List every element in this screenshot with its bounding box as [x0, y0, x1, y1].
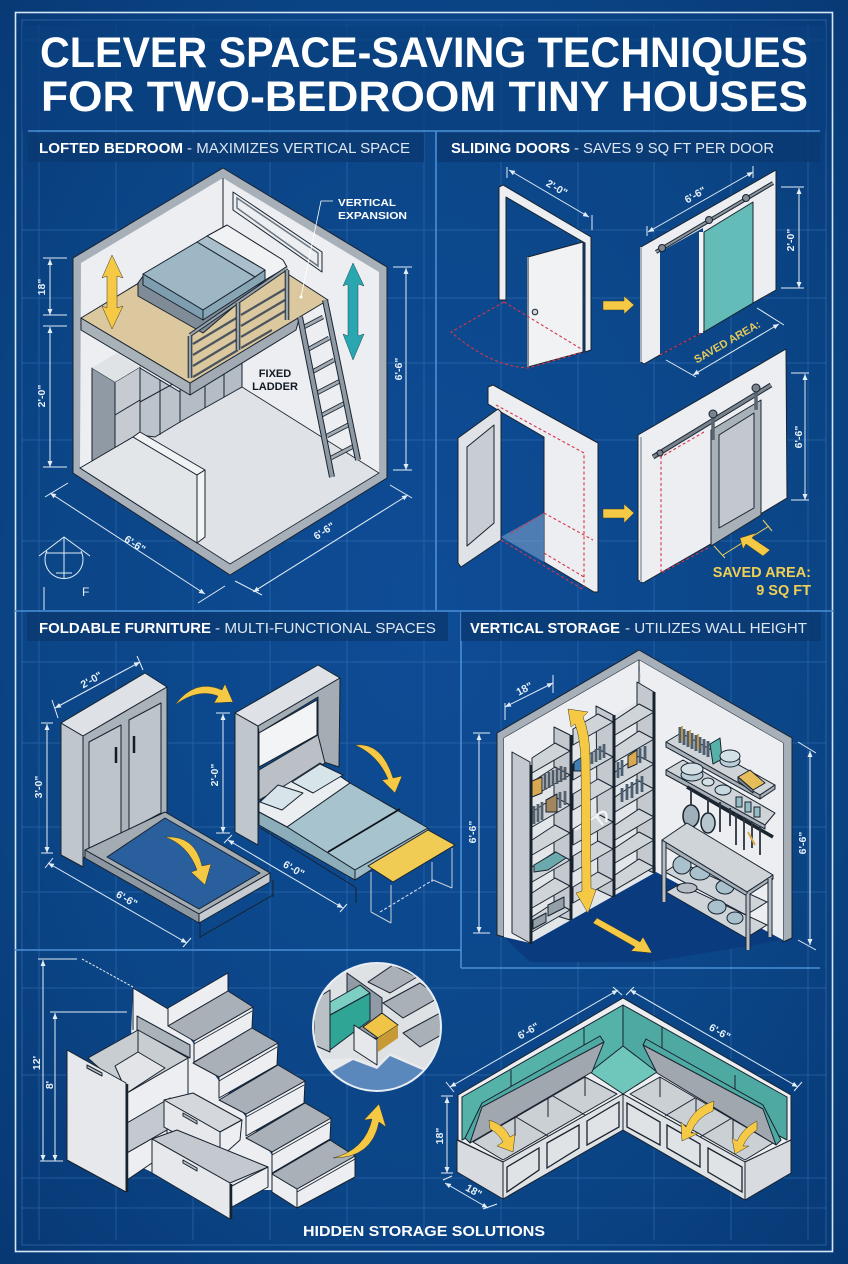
title: CLEVER SPACE-SAVING TECHNIQUES [40, 29, 808, 77]
heading: vertical storage: - UTILIZES WALL HEIGHT [625, 620, 807, 637]
loft railing [190, 268, 287, 378]
dimensions storage [467, 675, 816, 950]
heading: sliding doors [437, 133, 820, 162]
dimension bottom door: 6'-6" [793, 426, 805, 448]
arrow: bed unfolds [355, 745, 402, 793]
icon: roof section symbol [39, 537, 90, 610]
heading: foldable furniture: - MULTI-FUNCTIONAL SPACES [215, 620, 436, 637]
icon: roof section symbol: F [82, 585, 89, 599]
title [40, 29, 808, 121]
murphy bed closed [61, 673, 273, 938]
large bottom drawer [152, 1130, 268, 1219]
dimensions bench: 6'-6" [516, 1021, 541, 1042]
shelf items: books and boxes [532, 744, 645, 929]
arrow: swing to sliding top [603, 296, 634, 314]
stair treads and risers [168, 973, 355, 1208]
panel: vertical storage [461, 612, 821, 962]
saved area label top: SAVED AREA: [692, 319, 763, 366]
dimensions foldable: 2'-0" [79, 670, 104, 691]
arrow: teal vertical [343, 263, 364, 360]
room corner walls [497, 650, 792, 962]
dimensions top doors [507, 166, 804, 288]
heading: lofted bedroom: LOFTED BEDROOM [39, 140, 183, 157]
label: vertical expansion [300, 197, 407, 298]
heading: foldable furniture: FOLDABLE FURNITURE [39, 620, 211, 637]
arrow: vertical double [568, 709, 596, 913]
wall shelves with items [666, 726, 775, 855]
dimensions: 6'-6" [122, 533, 147, 556]
dimensions foldable: 6'-0" [281, 859, 306, 880]
swing door bottom [458, 385, 598, 592]
dimensions stairs: 8' [44, 1081, 56, 1089]
icon: fixed ladder [300, 300, 358, 477]
heading: vertical storage [461, 612, 821, 641]
dimension bottom door [791, 373, 809, 500]
sofa bench [80, 432, 205, 543]
loft platform [81, 232, 328, 395]
dimensions: 2'-0" [36, 385, 48, 407]
label: fixed ladder: LADDER [252, 381, 298, 393]
panel: foldable furniture [27, 612, 455, 947]
saved area label top [666, 308, 784, 377]
dimensions bench: 18" [463, 1182, 484, 1201]
label: vertical expansion: VERTICAL [338, 197, 397, 209]
arrow: yellow loft height [102, 255, 123, 329]
fold-out yellow table [368, 830, 455, 923]
label: vertical expansion: EXPANSION [338, 210, 407, 222]
room shell [73, 168, 387, 575]
dimensions top doors: 2'-0" [785, 229, 797, 251]
heading: lofted bedroom: - MAXIMIZES VERTICAL SPACE [187, 140, 410, 157]
small drawer [164, 1093, 242, 1158]
panel: lofted bedroom [28, 133, 424, 610]
storage cabinets under loft [92, 353, 242, 462]
kitchen work table [662, 823, 773, 950]
title: FOR TWO-BEDROOM TINY HOUSES [41, 73, 808, 121]
heading: lofted bedroom [28, 133, 424, 162]
dimensions foldable [33, 656, 347, 947]
dimensions top doors: 2'-0" [544, 178, 569, 199]
panel: hidden storage solutions [31, 959, 802, 1240]
barn door bottom [638, 349, 787, 583]
dimensions stairs: 12' [31, 1056, 43, 1070]
dimensions: 18" [36, 279, 48, 295]
label: fixed ladder: FIXED [259, 368, 291, 380]
arrows: lids opening [489, 1101, 757, 1154]
dimensions bench: 6'-6" [707, 1022, 732, 1043]
inset: drawer detail circle [312, 962, 442, 1092]
dimensions bench [434, 987, 802, 1209]
arrow: fold down bed [165, 837, 211, 885]
murphy bed open [235, 665, 428, 903]
dimensions top doors: 6'-6" [683, 185, 708, 206]
dimensions storage: 6'-6" [467, 821, 479, 843]
dimensions bench: 18" [434, 1128, 446, 1144]
stairs with drawers [67, 973, 355, 1219]
dimensions: 6'-6" [312, 520, 337, 543]
dimensions foldable: 6'-6" [114, 889, 139, 910]
arrow: closed to open [175, 684, 233, 705]
heading: sliding doors: SLIDING DOORS [451, 140, 570, 157]
arrow: swing to sliding bottom [603, 504, 634, 523]
sliding door top [641, 170, 776, 364]
saved area callout bottom [713, 520, 811, 599]
dimensions foldable: 2'-0" [209, 764, 221, 786]
tall shelving units [512, 682, 654, 944]
corner bench seat [457, 998, 791, 1200]
label: fixed ladder [252, 368, 298, 393]
dimensions storage: 18" [514, 680, 535, 699]
large pull-out drawer [67, 1030, 190, 1192]
heading: sliding doors: - SAVES 9 SQ FT PER DOOR [574, 140, 774, 157]
swing door top [451, 185, 591, 368]
dimensions storage: 6'-6" [797, 832, 809, 854]
arrow: to inset [333, 1104, 386, 1158]
bed on loft [138, 225, 287, 333]
heading: foldable furniture [27, 612, 448, 641]
dimensions foldable: 3'-0" [33, 776, 45, 798]
dimensions stairs [31, 959, 133, 1161]
heading: vertical storage: VERTICAL STORAGE [470, 620, 620, 637]
dimensions: 6'-6" [393, 358, 405, 380]
caption: hidden storage solutions: HIDDEN STORAGE SOLUTIONS [303, 1223, 545, 1240]
panel: sliding doors [437, 133, 820, 599]
saved area callout bottom: 9 SQ FT [756, 583, 811, 599]
saved area callout bottom: SAVED AREA: [713, 565, 811, 581]
dimensions [36, 258, 412, 603]
arrow: diagonal floor [593, 918, 652, 953]
